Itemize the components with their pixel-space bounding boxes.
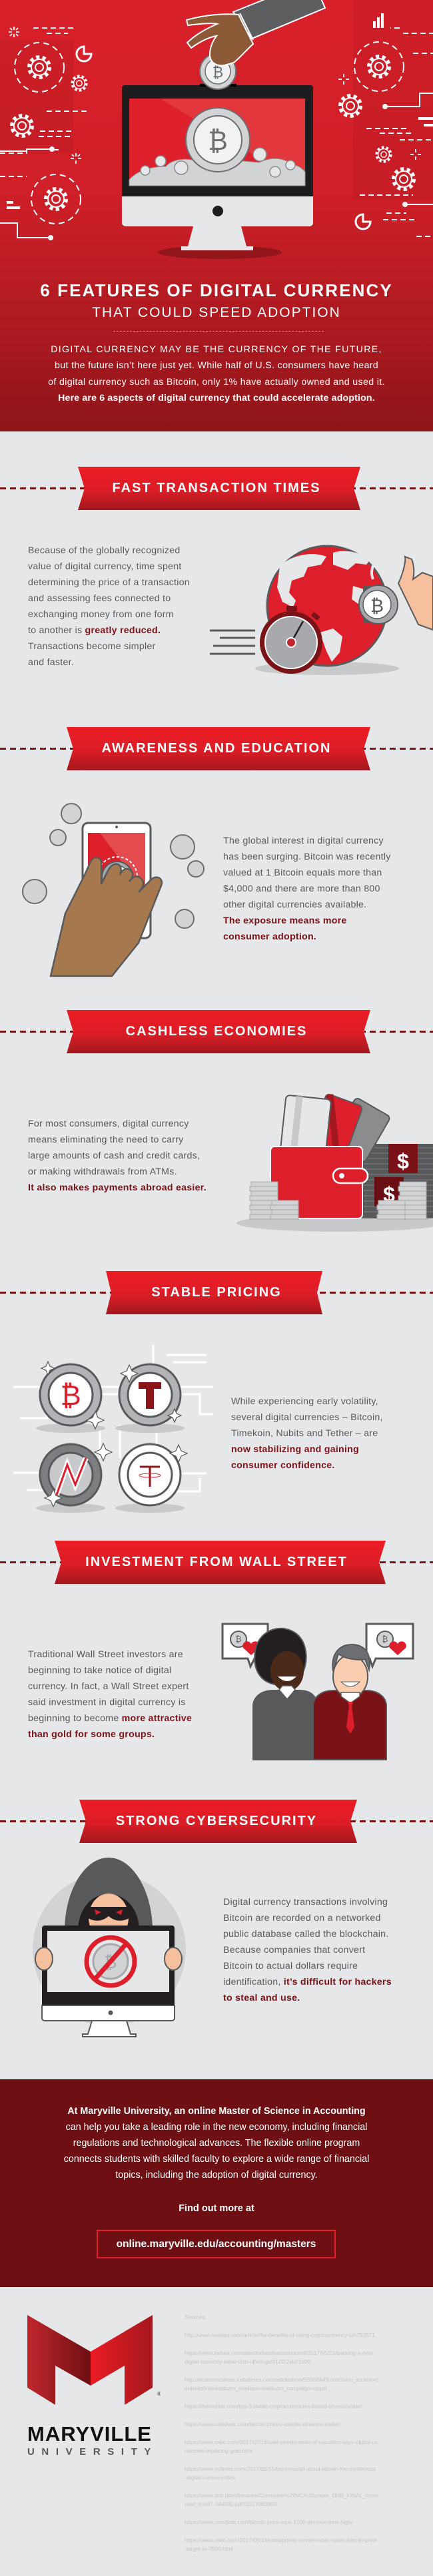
sources list: rrencies-replacing-gold.html xyxy=(185,2447,252,2454)
url box: online.maryville.edu/accounting/masters xyxy=(117,2238,316,2250)
text: cashless economies: For most consumers, digital currency xyxy=(28,1119,189,1129)
footer text: topics, including the adoption of digital currency. xyxy=(115,2170,318,2181)
hero illustration: gears, monitor and coin xyxy=(0,0,433,259)
text: stable pricing: consumer confidence. xyxy=(231,1460,335,1471)
illustration: two investors with speech bubbles: ₿ xyxy=(382,1635,388,1644)
text: awareness and education xyxy=(223,836,391,942)
text: investment from wall street: than gold for some groups. xyxy=(28,1729,155,1740)
text: stable pricing: now stabilizing and gaining xyxy=(231,1444,359,1455)
logo: maryville university xyxy=(27,2315,161,2457)
text: investment from wall street: Traditional Wall Street investors are xyxy=(28,1649,183,1660)
banner: awareness and education: AWARENESS AND EDUCATION xyxy=(102,741,331,756)
text: investment from wall street: beginning to take notice of digital xyxy=(28,1665,171,1676)
banner: cashless economies xyxy=(0,1010,433,1053)
text: awareness and education: $4,000 and there are more than 800 xyxy=(223,884,380,894)
banner: investment from wall street: INVESTMENT FROM WALL STREET xyxy=(85,1555,348,1569)
text: fast transaction times: value of digital currency, time spent xyxy=(28,561,182,572)
text: cashless economies xyxy=(28,1119,207,1193)
sources list: https://www.coindesk.com/bitcoin-prices-volatile-etherum-trader/ xyxy=(185,2421,340,2428)
text: fast transaction times: determining the price of a transaction xyxy=(28,577,190,588)
banner: fast transaction times: FAST TRANSACTION TIMES xyxy=(113,481,320,495)
sources list: https://www.nytimes.com/2017/05/15/business/all-about-bitcoin-the-mysterious xyxy=(185,2465,376,2472)
text: stable pricing xyxy=(231,1396,383,1471)
sources list: cted_tcm47-344530.pdf?2017060900 xyxy=(185,2501,276,2507)
text: investment from wall street xyxy=(28,1649,192,1740)
sources list: https://www.dnb.nl/en/binaries/Consumer%20VC%20paper_DNB_FINAL_corre xyxy=(185,2492,378,2499)
text: stable pricing: several digital currencies – Bitcoin, xyxy=(231,1412,383,1423)
sources list: Sources: xyxy=(185,2314,207,2320)
text: investment from wall street: said investment in digital currency is xyxy=(28,1697,186,1708)
logo: maryville university: MARYVILLE xyxy=(27,2422,152,2446)
illustration: phone in hand with coins: ₿ xyxy=(112,870,123,886)
footer text: connects students with skilled faculty to explore a wide range of financial xyxy=(64,2154,369,2165)
text: cashless economies: means eliminating the need to carry xyxy=(28,1135,184,1145)
text: awareness and education: The global interest in digital currency xyxy=(223,836,384,846)
text: strong cybersecurity: Bitcoin are recorded on a networked xyxy=(223,1913,381,1924)
hero intro text xyxy=(48,344,385,403)
text: fast transaction times xyxy=(28,545,190,668)
monitor xyxy=(158,246,282,259)
sources list: http://economictimes.indiatimes.com/articleshow/55908649.cms?utm_source=c xyxy=(185,2376,378,2383)
hand xyxy=(233,0,325,39)
text: cashless economies: or making withdrawals from ATMs. xyxy=(28,1166,177,1177)
sources list: https://www.cnbc.com/2017/08/14/standpoints-ronnie-moas-raises-bitcoin-price xyxy=(185,2537,377,2543)
text: fast transaction times: and faster. xyxy=(28,657,74,668)
sources list: https://www.forbes.com/sites/forbesfinancecouncil/2017/05/23/backing-a-new- xyxy=(185,2350,374,2356)
hero panel xyxy=(0,0,433,431)
footer text xyxy=(64,2106,369,2181)
illustration: globe with stopwatch: ₿ xyxy=(370,596,384,616)
illustration: two investors with speech bubbles: ₿ xyxy=(236,1635,242,1644)
text: investment from wall street: currency. In fact, a Wall Street expert xyxy=(28,1681,189,1692)
text: fast transaction times: Because of the globally recognized xyxy=(28,545,181,556)
banner: strong cybersecurity: STRONG CYBERSECURITY xyxy=(116,1814,317,1828)
text: fast transaction times: exchanging money from one form xyxy=(28,609,174,620)
text: cashless economies: It also makes payments abroad easier. xyxy=(28,1182,207,1193)
text: awareness and education: consumer adoption. xyxy=(223,931,316,942)
sources list: digital-currency-initial-coin-offerings/#12f22ab21d90 xyxy=(185,2358,310,2365)
footer text: At Maryville University, an online Master of Science in Accounting xyxy=(67,2106,366,2117)
illustration: wallet with cards, cash and coins: $ xyxy=(383,1182,395,1206)
footer call to action panel xyxy=(0,2079,433,2287)
hero illustration: gears, monitor and coin: ₿ xyxy=(208,127,228,156)
text: investment from wall street: beginning to become more attractive xyxy=(28,1713,192,1724)
hero title: 6 FEATURES OF DIGITAL CURRENCY xyxy=(40,280,393,300)
text: strong cybersecurity: public database called the blockchain. xyxy=(223,1929,389,1939)
illustration: globe with stopwatch xyxy=(210,545,433,675)
sources list: ontentofinterest&utm_medium=text&utm_campaign=cppst xyxy=(185,2385,327,2392)
illustration: hacker with monitor xyxy=(33,1858,186,2037)
hero subtitle: THAT COULD SPEED ADOPTION xyxy=(92,305,341,320)
text: strong cybersecurity: Digital currency transactions involving xyxy=(223,1897,388,1908)
illustration: phone in hand with coins xyxy=(22,803,205,977)
banner: stable pricing: STABLE PRICING xyxy=(151,1285,282,1300)
illustration: four stable coins: ₿ xyxy=(60,1380,81,1411)
banner: awareness and education xyxy=(0,727,433,770)
text: strong cybersecurity xyxy=(223,1897,392,2003)
text: awareness and education: has been surging. Bitcoin was recently xyxy=(223,852,391,862)
hero intro text: but the future isn’t here just yet. While half of U.S. consumers have heard xyxy=(55,360,378,371)
sources list xyxy=(185,2314,378,2552)
sources list: http://www.nasdaq.com/article/the-benefits-of-using-cryptocurrency-cm753571 xyxy=(185,2332,375,2338)
banner: stable pricing xyxy=(0,1271,433,1314)
banner: strong cybersecurity xyxy=(0,1800,433,1843)
text: stable pricing: Timekoin, Nubits and Tether – are xyxy=(231,1428,378,1439)
logo: maryville university: UNIVERSITY xyxy=(27,2446,158,2457)
text: fast transaction times: and assessing fees connected to xyxy=(28,593,171,604)
text: cashless economies: large amounts of cash and credit cards, xyxy=(28,1151,200,1161)
text: awareness and education: The exposure means more xyxy=(223,915,347,926)
text: strong cybersecurity: Bitcoin to actual dollars require xyxy=(223,1961,358,1971)
illustration: wallet with cards, cash and coins xyxy=(236,1093,433,1232)
text: stable pricing: While experiencing early volatility, xyxy=(231,1396,378,1407)
text: fast transaction times: to another is greatly reduced. xyxy=(28,625,161,636)
hero intro text: of digital currency such as Bitcoin, only 1% have actually owned and used it. xyxy=(48,377,385,387)
illustration: four stable coins xyxy=(13,1345,213,1513)
footer text: can help you take a leading role in the new economy, including financial xyxy=(66,2122,367,2133)
text: awareness and education: other digital currencies available. xyxy=(223,900,366,910)
sources list: -digital-currency.html xyxy=(185,2474,235,2481)
sources list: -target-to-7500.html xyxy=(185,2545,232,2552)
banner: fast transaction times xyxy=(0,467,433,510)
illustration: two investors with speech bubbles xyxy=(221,1623,414,1760)
hero intro text: DIGITAL CURRENCY MAY BE THE CURRENCY OF THE FUTURE, xyxy=(51,344,382,355)
text: awareness and education: valued at 1 Bitcoin equals more than xyxy=(223,868,382,878)
text: fast transaction times: Transactions become simpler xyxy=(28,641,156,652)
sources list: https://www.coindesk.com/bitcoin-price-tops-1700-set-new-time-high/ xyxy=(185,2519,352,2525)
url box xyxy=(97,2230,336,2258)
illustration: wallet with cards, cash and coins: $ xyxy=(397,1149,409,1173)
text: strong cybersecurity: identification, it’s difficult for hackers xyxy=(223,1977,392,1987)
footer text: regulations and technological advances. The flexible online program xyxy=(73,2138,360,2149)
find out more: Find out more at xyxy=(179,2203,254,2214)
text: strong cybersecurity: to steal and use. xyxy=(223,1993,300,2003)
sources list: https://themerkle.com/top-3-stable-cryptocurrencies-based-on-usd-value/ xyxy=(185,2403,362,2410)
illustration: hacker with monitor: ₿ xyxy=(104,1952,117,1972)
banner: investment from wall street xyxy=(0,1541,433,1584)
banner: cashless economies: CASHLESS ECONOMIES xyxy=(126,1024,307,1039)
hero intro text: Here are 6 aspects of digital currency that could accelerate adoption. xyxy=(58,393,375,403)
hero illustration: gears, monitor and coin: ₿ xyxy=(213,64,223,81)
text: strong cybersecurity: Because companies that convert xyxy=(223,1945,365,1955)
sources list: https://www.cnbc.com/2017/07/18/wall-streets-dean-of-valuation-says-digital-cu xyxy=(185,2439,378,2446)
